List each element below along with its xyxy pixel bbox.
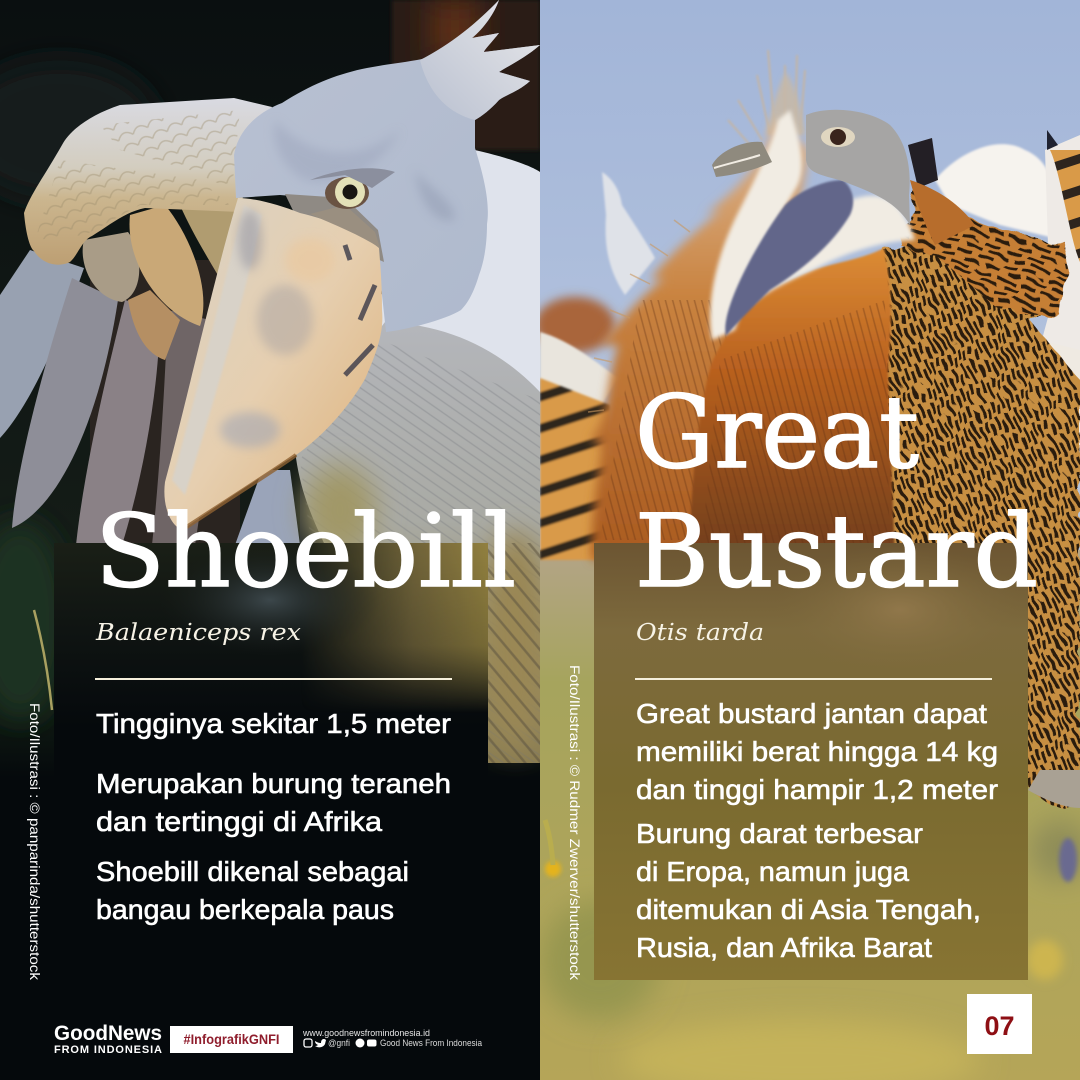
icon: twitter [315, 1039, 326, 1047]
logo: GoodNews From Indonesia [54, 1022, 162, 1056]
dark plume tip [910, 180, 975, 245]
bill [164, 198, 382, 530]
social links: @gnfi [328, 1038, 350, 1049]
photo credit right: Foto/Ilustrasi : © Rudmer Zwerver/shutterstock [567, 665, 582, 980]
icon: youtube [367, 1040, 376, 1046]
title: Great Bustard: Bustard [635, 493, 1038, 610]
deep orange breast [690, 248, 895, 560]
blue-grey throat patch [725, 180, 853, 336]
text block: great bustard facts: dan tinggi hampir 1,2 meter [636, 774, 998, 805]
social links: www.goodnewsfromindonesia.id [302, 1028, 430, 1039]
text block: shoebill facts: bangau berkepala paus [96, 894, 394, 925]
social links: Good News From Indonesia [380, 1038, 483, 1049]
text block: shoebill facts: Tingginya sekitar 1,5 meter [96, 708, 451, 739]
blurred brown shape [535, 297, 615, 353]
left white feather [602, 172, 655, 295]
dark foliage background [0, 0, 540, 720]
white neck band [710, 110, 915, 340]
folded wing [24, 98, 272, 265]
photo credit left: Foto/Ilustrasi : © panparinda/shutterstock [27, 703, 42, 980]
panel: great bustard photo [535, 0, 1080, 1080]
text block: shoebill facts: Merupakan burung teraneh [96, 768, 451, 799]
text block: great bustard facts [636, 698, 998, 963]
neck and breast [296, 322, 550, 763]
white back plumage [382, 150, 540, 392]
logo: GoodNews From Indonesia: FROM INDONESIA [54, 1044, 162, 1056]
bustard head and eye [712, 110, 910, 225]
crest plumes [728, 50, 806, 145]
hashtag badge: #InfografikGNFI [184, 1032, 280, 1047]
social links [302, 1028, 483, 1049]
long grey flight feathers [0, 250, 325, 545]
text block: great bustard facts: Rusia, dan Afrika Barat [636, 932, 932, 963]
head and crest [234, 0, 540, 332]
title: Shoebill: Shoebill [95, 493, 516, 610]
striped left wing and white feather [540, 332, 618, 560]
panel: shoebill text background [54, 543, 488, 763]
icon: facebook [356, 1038, 364, 1048]
hashtag badge [170, 1026, 293, 1053]
title: Great Bustard: Great [635, 374, 919, 491]
text block: great bustard facts: Burung darat terbesar [636, 818, 923, 849]
text block: shoebill facts [96, 708, 451, 925]
icon: instagram [304, 1039, 312, 1047]
white back feathers [908, 130, 1080, 480]
panel: great bustard text background [594, 543, 1028, 980]
eye [310, 168, 395, 209]
title: Great Bustard [635, 374, 1038, 610]
striped body [860, 190, 1080, 812]
text block: shoebill facts: Shoebill dikenal sebagai [96, 856, 409, 887]
text block: great bustard facts: memiliki berat hingga 14 kg [636, 736, 998, 767]
scientific name: Otis tarda: Otis tarda [636, 620, 764, 646]
page number badge [967, 994, 1032, 1054]
text block: great bustard facts: ditemukan di Asia Tengah, [636, 894, 981, 925]
logo: GoodNews From Indonesia: GoodNews [54, 1022, 162, 1045]
divider right [635, 678, 992, 680]
scientific name: Balaeniceps rex: Balaeniceps rex [95, 620, 301, 646]
panel: shoebill photo [0, 0, 550, 1080]
blurred meadow [540, 820, 1080, 1080]
orange neck ruff [588, 120, 810, 560]
page number badge: 07 [984, 1011, 1015, 1041]
cream covert feathers [83, 205, 240, 360]
text block: great bustard facts: Great bustard jantan dapat [636, 698, 987, 729]
text block: shoebill facts: dan tertinggi di Afrika [96, 806, 383, 837]
text block: great bustard facts: di Eropa, namun juga [636, 856, 910, 887]
divider left [95, 678, 452, 680]
